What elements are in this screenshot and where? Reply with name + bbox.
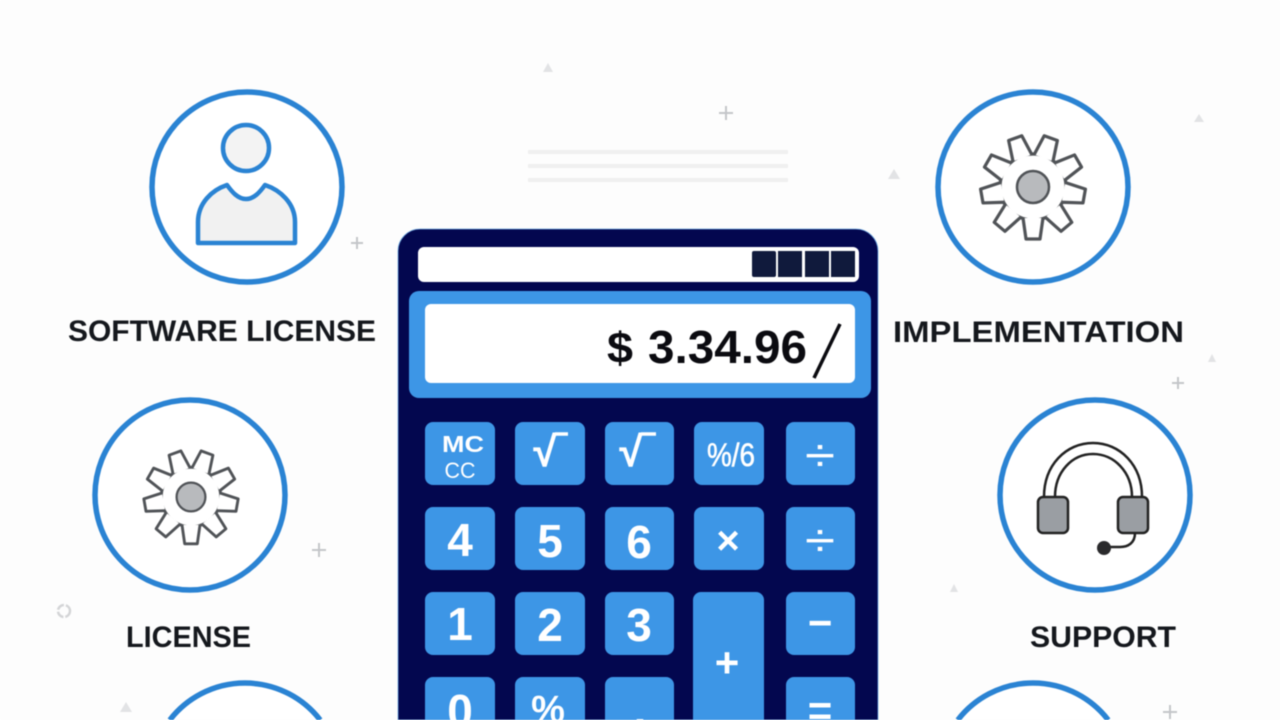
display: $ <box>607 324 633 373</box>
label: implementation: IMPLEMENTATION <box>893 316 1184 349</box>
label: license: LICENSE <box>126 621 251 654</box>
key: 5: 5 <box>537 515 563 567</box>
key: percent <box>515 677 585 720</box>
key: 5 <box>515 507 585 570</box>
icon: license gear <box>95 400 285 590</box>
label: software license: SOFTWARE LICENSE <box>68 315 376 348</box>
key: 6: 6 <box>626 516 652 568</box>
key: plus <box>693 592 764 720</box>
key: multiply: × <box>716 519 740 563</box>
top status bar <box>418 247 859 282</box>
icon: software license person <box>152 92 342 282</box>
display: 3.34.96 <box>648 321 807 373</box>
key: divide: ÷ <box>805 514 835 566</box>
key: 4 <box>425 507 495 570</box>
icon: support headset <box>1000 400 1190 590</box>
partial circle bottom left <box>170 683 320 720</box>
key: 3: 3 <box>626 599 652 651</box>
key: 2 <box>515 592 585 655</box>
key: 4: 4 <box>447 514 473 566</box>
calculator <box>398 229 878 720</box>
display <box>409 291 871 398</box>
key: root: √ <box>619 428 643 475</box>
key: decimal point <box>605 677 674 720</box>
key: multiply <box>694 507 764 570</box>
key: 1: 1 <box>447 598 473 650</box>
key: 0 <box>425 677 495 720</box>
key: percent: %/6 <box>707 437 755 473</box>
key: divide: ÷ <box>805 429 835 481</box>
key: minus <box>786 592 855 655</box>
keypad <box>425 422 855 720</box>
key: 6 <box>605 507 674 570</box>
partial circle bottom right <box>958 683 1108 720</box>
key: divide <box>786 422 855 485</box>
key: root <box>515 422 585 485</box>
key: minus: − <box>808 599 832 646</box>
key: divide <box>786 507 855 570</box>
blurred title placeholder lines <box>528 152 788 180</box>
key: MC CC <box>425 422 495 485</box>
key: plus: + <box>715 639 739 686</box>
key: 1 <box>425 592 495 655</box>
calculator body <box>398 229 878 720</box>
label: support: SUPPORT <box>1030 621 1176 654</box>
icon: implementation gear <box>938 92 1128 282</box>
key: 2: 2 <box>537 599 563 651</box>
key: percent <box>694 422 764 485</box>
key: MC CC: CC <box>444 458 476 483</box>
key: equals <box>786 677 855 720</box>
key: root: √ <box>533 428 557 475</box>
key: root <box>605 422 674 485</box>
key: 3 <box>605 592 674 655</box>
key: MC CC: MC <box>442 431 484 457</box>
